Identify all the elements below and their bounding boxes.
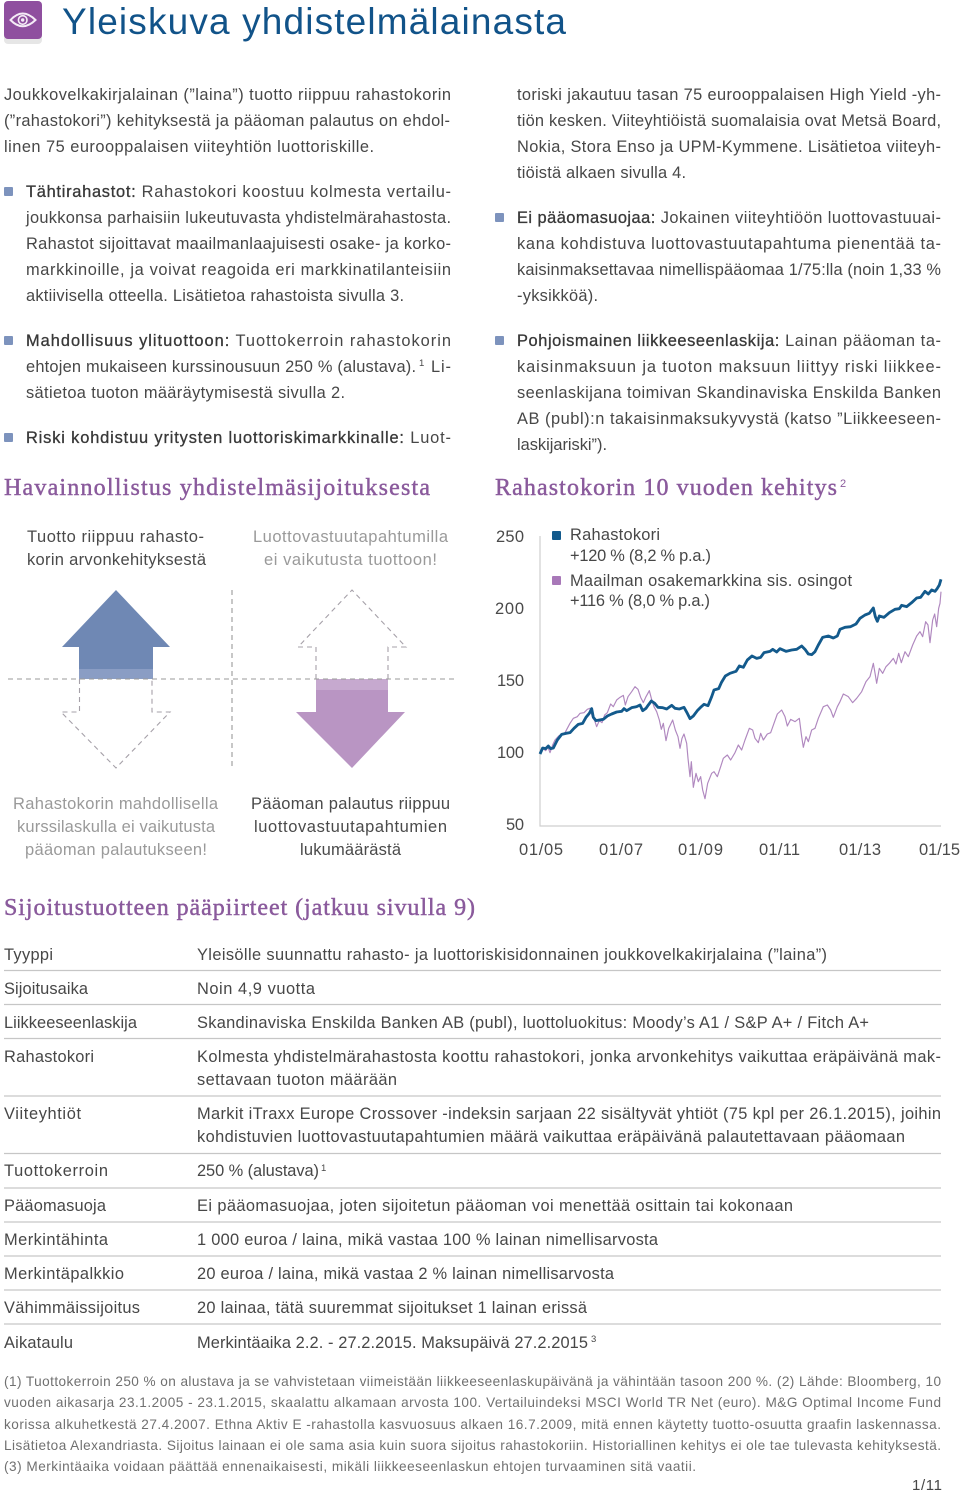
y axis labels: 50 bbox=[506, 816, 524, 834]
row: Merkintähinta: 1 000 euroa / laina, mikä vastaa 100 % lainan nimellisarvosta bbox=[197, 1231, 659, 1249]
bullet: Ei pääomasuojaa bbox=[495, 209, 941, 305]
row: Merkintäpalkkio: Merkintäpalkkio bbox=[4, 1265, 124, 1283]
legend: +120 % (8,2 % p.a.) bbox=[570, 547, 711, 565]
series: world equities bbox=[540, 592, 941, 799]
row: Viiteyhtiöt: Markit iTraxx Europe Crossover -indeksin sarjaan 22 sisältyvät yhtiöt (75 kpl per 26.1.2015), joihin bbox=[197, 1105, 941, 1123]
row: Sijoitusaika bbox=[4, 980, 316, 998]
label: pääoman palautus: luottovastuutapahtumien bbox=[254, 818, 447, 836]
bullet: Mahdollisuus ylituottoon: 1 bbox=[419, 358, 424, 369]
bullet: Pohjoismainen liikkeeseenlaskija: seenlaskijana toimivan Skandinaviska Enskilda Banken bbox=[517, 384, 941, 402]
legend: +116 % (8,0 % p.a.) bbox=[570, 592, 710, 610]
row: Viiteyhtiöt: kohdistuvien luottovastuutapahtumien määrä vaikuttaa eräpäivänä palautettavaan pääomaan bbox=[197, 1128, 905, 1146]
intro paragraph: (”rahastokori”) kehityksestä ja pääoman palautus on ehdol- bbox=[4, 112, 450, 130]
row: Aikataulu bbox=[4, 1334, 596, 1352]
continued paragraph: tiön kesken. Viiteyhtiöistä suomalaisia ovat Metsä Board, bbox=[517, 112, 941, 130]
line chart: fund basket vs world equities bbox=[495, 526, 960, 859]
x axis labels: 01/05 bbox=[519, 841, 563, 859]
bullet: Tähtirahastot: joukkonsa parhaisiin lukeutuvasta yhdistelmärahastosta. bbox=[25, 209, 451, 227]
continued paragraph: Nokia, Stora Enso ja UPM-Kymmene. Lisätietoa viiteyh- bbox=[517, 138, 941, 156]
label: ei vaikutusta palautukseen: Rahastokorin mahdollisella bbox=[13, 795, 219, 813]
x axis labels bbox=[519, 841, 960, 859]
arrow: dashed down bbox=[61, 679, 170, 768]
bullet: Riski kohdistuu: Riski kohdistuu yritysten luottoriskimarkkinalle: Luot- bbox=[26, 429, 451, 447]
row: Tuottokerroin: 1 bbox=[321, 1163, 326, 1174]
row: Merkintäpalkkio bbox=[4, 1265, 615, 1283]
row: Pääomasuoja: Pääomasuoja bbox=[4, 1197, 107, 1215]
bullet: Ei pääomasuojaa: kaisinmaksettavaa nimellispääomaa 1/75:lla (noin 1,33 % bbox=[517, 261, 941, 279]
footnotes bbox=[4, 1374, 941, 1474]
row: Aikataulu: Aikataulu bbox=[4, 1334, 73, 1352]
x axis labels: 01/13 bbox=[839, 841, 881, 859]
row: Vähimmäissijoitus bbox=[4, 1299, 588, 1317]
table: product features bbox=[4, 946, 941, 1352]
row: Aikataulu: 3 bbox=[591, 1334, 596, 1345]
row: Liikkeeseenlaskija: Skandinaviska Enskilda Banken AB (publ), luottoluokitus: Moody’s A1 / S&P A+ / Fitch A+ bbox=[197, 1014, 869, 1032]
x axis labels: 01/09 bbox=[678, 841, 723, 859]
label: tuotto riippuu bbox=[27, 528, 207, 569]
footnotes: (1) Tuottokerroin 250 % on alustava ja se vahvistetaan viimeistään liikkeeseenlaskupäivänä ja vähintään tasoon 200 %. (2) Lähde: Bloomberg, 10 bbox=[4, 1374, 941, 1389]
series: fund basket bbox=[540, 579, 941, 754]
label: ei vaikutusta tuottoon: ei vaikutusta tuottoon! bbox=[264, 551, 437, 569]
heading: Havainnollistus: Havainnollistus yhdistelmäsijoituksesta bbox=[4, 475, 430, 501]
row: Tyyppi: Yleisölle suunnattu rahasto- ja luottoriskisidonnainen joukkovelkakirjalaina (”laina”) bbox=[197, 946, 827, 964]
bullet: Pohjoismainen liikkeeseenlaskija: kaisinmaksuun ja tuoton maksuun liittyy riski liikkee- bbox=[517, 358, 941, 376]
series lines bbox=[540, 579, 941, 799]
heading: Sijoitustuotteen pääpiirteet: Sijoitustuotteen pääpiirteet (jatkuu sivulla 9) bbox=[4, 895, 475, 921]
y axis labels: 150 bbox=[497, 672, 524, 690]
row: Pääomasuoja: Ei pääomasuojaa, joten sijoitetun pääoman voi menettää osittain tai kokonaan bbox=[197, 1197, 793, 1215]
row: Aikataulu: Merkintäaika 2.2. - 27.2.2015. Maksupäivä 27.2.2015 bbox=[197, 1334, 588, 1352]
intro paragraph: Joukkovelkakirjalainan (”laina”) tuotto riippuu rahastokorin bbox=[4, 86, 451, 104]
footnotes: Lisätietoa Alexandriasta. Sijoitus lainaan ei ole sama asia kuin suora sijoitus rahastokoriin. Historiallinen kehitys ei ole tae tulevasta kehityksestä. bbox=[4, 1438, 941, 1453]
intro paragraph: linen 75 eurooppalaisen viiteyhtiön luottoriskille. bbox=[4, 138, 374, 156]
axes bbox=[540, 536, 941, 826]
arrow: purple down bbox=[296, 679, 405, 768]
footnotes: korissa alkuhetkestä 27.4.2007. Ethna Aktiv E -rahastolla kasvuosuus alkaen 16.7.2009, mitä ennen käytetty tuotto-osuutta graafin laskennassa. bbox=[4, 1417, 941, 1432]
legend: Maailman osakemarkkina sis. osingot bbox=[570, 572, 852, 590]
bullet: Tähtirahastot: aktiivisella otteella. Lisätietoa rahastoista sivulla 3. bbox=[26, 287, 404, 305]
label: ei vaikutusta palautukseen bbox=[13, 795, 219, 859]
heading: Rahastokorin kehitys: Rahastokorin 10 vuoden kehitys bbox=[495, 475, 837, 501]
label: ei vaikutusta tuottoon bbox=[253, 528, 449, 569]
bullet: Pohjoismainen liikkeeseenlaskija: Pohjoismainen liikkeeseenlaskija: Lainan pääoman ta- bbox=[517, 332, 941, 350]
y axis labels bbox=[495, 528, 524, 834]
label: pääoman palautus: Pääoman palautus riippuu bbox=[251, 795, 450, 813]
label: ei vaikutusta tuottoon: Luottovastuutapahtumilla bbox=[253, 528, 449, 546]
row: Tuottokerroin: 250 % (alustava) bbox=[197, 1162, 319, 1180]
arrow: blue up bbox=[62, 590, 170, 679]
row: Liikkeeseenlaskija: Liikkeeseenlaskija bbox=[4, 1014, 138, 1032]
row: Merkintähinta: Merkintähinta bbox=[4, 1231, 109, 1249]
bullet: Mahdollisuus ylituottoon: sätietoa tuoton määräytymisestä sivulla 2. bbox=[26, 384, 345, 402]
row: Tyyppi: Tyyppi bbox=[4, 946, 53, 964]
row: Rahastokori: Kolmesta yhdistelmärahastosta koottu rahastokori, jonka arvonkehitys vaikuttaa eräpäivänä mak- bbox=[197, 1048, 941, 1066]
text block: right column bbox=[495, 86, 941, 454]
bullet: Ei pääomasuojaa: kana kohdistuva luottovastuutapahtuma pienentää ta- bbox=[517, 235, 941, 253]
bullet: Pohjoismainen liikkeeseenlaskija bbox=[495, 332, 941, 454]
bullet: Pohjoismainen liikkeeseenlaskija: AB (publ):n takaisinmaksukyvystä (katso ”Liikkeeseen- bbox=[517, 410, 941, 428]
title: Yleiskuva yhdistelmälainasta bbox=[62, 1, 566, 42]
bullet: Mahdollisuus ylituottoon: Mahdollisuus ylituottoon: Tuottokerroin rahastokorin bbox=[26, 332, 451, 350]
y axis labels: 250 bbox=[496, 528, 524, 546]
label: pääoman palautus: lukumäärästä bbox=[300, 841, 402, 859]
x axis labels: 01/07 bbox=[599, 841, 643, 859]
bullet: Tähtirahastot: Rahastot sijoittavat maailmanlaajuisesti osake- ja korko- bbox=[26, 235, 451, 253]
bullet: Tähtirahastot: markkinoille, ja voivat reagoida eri markkinatilanteisiin bbox=[26, 261, 451, 279]
bullet: Ei pääomasuojaa: -yksikköä). bbox=[517, 287, 598, 305]
row: Tuottokerroin bbox=[4, 1162, 326, 1180]
bullet: Pohjoismainen liikkeeseenlaskija: laskijariski”). bbox=[517, 436, 607, 454]
label: ei vaikutusta palautukseen: kurssilaskulla ei vaikutusta bbox=[17, 818, 216, 836]
row: Sijoitusaika: Sijoitusaika bbox=[4, 980, 89, 998]
text block: left column bbox=[4, 86, 451, 447]
row: Vähimmäissijoitus: Vähimmäissijoitus bbox=[4, 1299, 140, 1317]
continued paragraph: tiöistä alkaen sivulla 4. bbox=[517, 164, 686, 182]
row: Rahastokori bbox=[4, 1048, 941, 1089]
y axis labels: 200 bbox=[495, 600, 524, 618]
continued paragraph bbox=[517, 86, 941, 182]
row: Vähimmäissijoitus: 20 lainaa, tätä suuremmat sijoitukset 1 lainan erissä bbox=[197, 1299, 588, 1317]
row: Rahastokori: Rahastokori bbox=[4, 1048, 94, 1066]
legend: Rahastokori bbox=[570, 526, 660, 544]
x axis labels: 01/15 bbox=[919, 841, 960, 859]
footnotes: (3) Merkintäaika voidaan päättää ennenaikaisesti, mikäli liikkeeseenlaskun ehtojen turvaaminen sitä vaatii. bbox=[4, 1459, 696, 1474]
continued paragraph: toriski jakautuu tasan 75 eurooppalaisen High Yield -yh- bbox=[517, 86, 941, 104]
bullet: Mahdollisuus ylituottoon bbox=[4, 332, 451, 402]
heading: Rahastokorin kehitys: 2 bbox=[840, 478, 846, 490]
intro paragraph bbox=[4, 86, 451, 156]
diagram: arrows bbox=[8, 528, 456, 859]
bullet: Mahdollisuus ylituottoon: Li- bbox=[431, 358, 451, 376]
label: pääoman palautus bbox=[251, 795, 450, 859]
bullet: Ei pääomasuojaa: Ei pääomasuojaa: Jokainen viiteyhtiöön luottovastuuai- bbox=[517, 209, 941, 227]
row: Sijoitusaika: Noin 4,9 vuotta bbox=[197, 980, 316, 998]
legend bbox=[552, 526, 852, 610]
footnotes: vuoden aikasarja 23.1.2005 - 23.1.2015, skaalattu alkamaan arvosta 100. Vertailuindeksi MSCI World TR Net (euro). M&G Optimal Income Fund bbox=[4, 1395, 941, 1410]
row: Viiteyhtiöt: Viiteyhtiöt bbox=[4, 1105, 81, 1123]
x axis labels: 01/11 bbox=[759, 841, 800, 859]
row: Tuottokerroin: Tuottokerroin bbox=[4, 1162, 108, 1180]
row: Viiteyhtiöt bbox=[4, 1105, 941, 1146]
bullet: Mahdollisuus ylituottoon: ehtojen mukaiseen kurssinousuun 250 % (alustava). bbox=[26, 358, 416, 376]
bullet: Tähtirahastot bbox=[4, 183, 451, 305]
label: tuotto riippuu: korin arvonkehityksestä bbox=[27, 551, 207, 569]
icon: eye bbox=[4, 1, 42, 44]
label: tuotto riippuu: Tuotto riippuu rahasto- bbox=[27, 528, 204, 546]
row: Merkintäpalkkio: 20 euroa / laina, mikä vastaa 2 % lainan nimellisarvosta bbox=[197, 1265, 615, 1283]
bullet: Tähtirahastot: Tähtirahastot: Rahastokori koostuu kolmesta vertailu- bbox=[26, 183, 451, 201]
y axis labels: 100 bbox=[497, 744, 524, 762]
label: ei vaikutusta palautukseen: pääoman palautukseen! bbox=[25, 841, 207, 859]
row: Rahastokori: settavaan tuoton määrään bbox=[197, 1071, 397, 1089]
arrow: dashed up bbox=[298, 590, 406, 679]
